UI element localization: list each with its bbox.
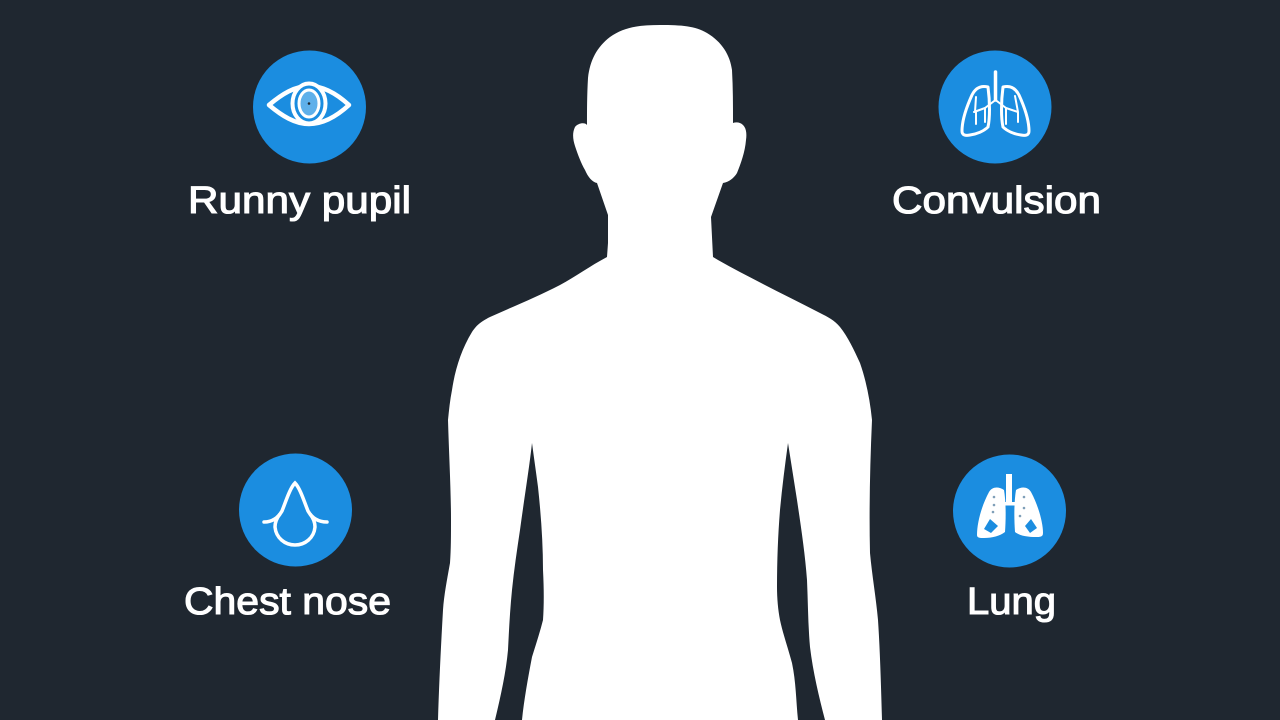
- icon: filled lungs: [953, 454, 1066, 568]
- human body silhouette: [438, 25, 882, 720]
- symptom: lung: [953, 454, 1066, 623]
- symptom: runny pupil: [188, 50, 411, 222]
- symptom: convulsion: [892, 50, 1101, 222]
- icon: eye: [253, 50, 366, 164]
- symptom: chest nose: [184, 454, 391, 623]
- icon: outlined lungs: [938, 50, 1052, 164]
- icon: nose drop: [239, 454, 352, 566]
- label: Convulsion: Convulsion: [892, 180, 1101, 222]
- label: Runny pupil: Runny pupil: [188, 180, 411, 222]
- label: Lung: Lung: [967, 581, 1056, 623]
- label: Chest nose: Chest nose: [184, 581, 391, 623]
